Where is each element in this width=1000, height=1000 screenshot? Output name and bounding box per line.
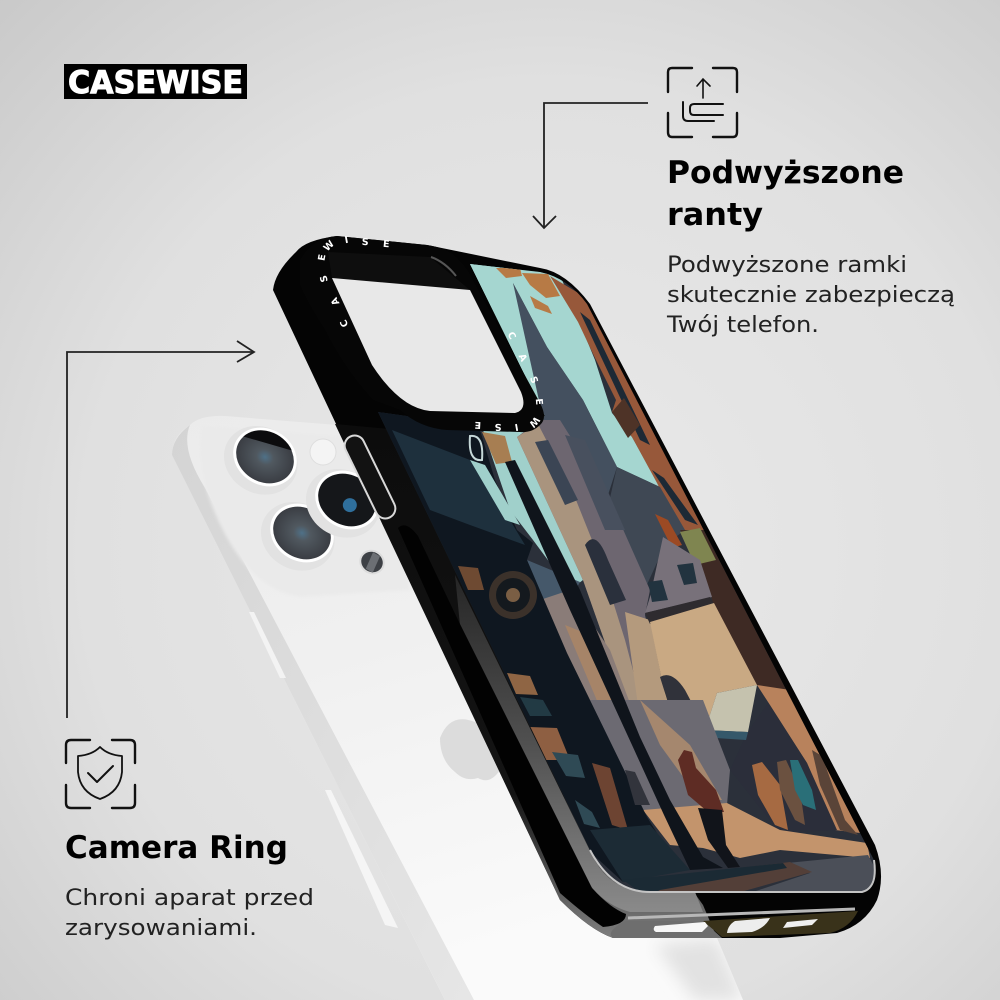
right dark building [680, 530, 800, 715]
awning [705, 685, 757, 732]
sky lower strip [483, 430, 583, 590]
shop signs [458, 566, 484, 590]
inner grey lip [455, 575, 703, 912]
gothic porch [625, 612, 667, 700]
ring lettering: A [516, 352, 529, 364]
dark alcove [794, 743, 837, 830]
distant hill [527, 560, 580, 599]
text: camera ring description: Chroni aparat przed [65, 885, 314, 911]
lens 2 [248, 489, 347, 584]
dormers [648, 563, 697, 602]
left dark building [378, 412, 656, 882]
ring lettering: E [383, 239, 390, 250]
clock [489, 571, 537, 619]
ring lettering: S [494, 421, 502, 432]
cornice of right building [612, 398, 640, 438]
lens 3 [293, 456, 392, 551]
ring lettering: S [318, 274, 331, 283]
arrow: raised edges connector [533, 103, 648, 228]
text: raised edges description: Twój telefon. [666, 312, 819, 338]
ring lettering: E [533, 398, 544, 405]
ring lettering [317, 235, 544, 432]
ring lettering: S [527, 375, 540, 385]
screen inner edge highlight [590, 850, 875, 892]
white phone back [172, 413, 743, 1000]
side button [249, 612, 286, 678]
inner black slot [398, 525, 626, 927]
port left [654, 922, 708, 932]
curb [626, 863, 787, 891]
case body [273, 236, 881, 938]
text: raised edges description: skutecznie zabezpieczą [667, 282, 955, 308]
ring lettering: I [344, 235, 349, 246]
case over phone translucent part [335, 424, 717, 938]
lens 1 [211, 413, 310, 508]
lower shading [655, 938, 743, 1000]
flowers [680, 528, 716, 565]
building right upper [550, 276, 705, 530]
camera ring [300, 235, 544, 432]
roof hill [610, 467, 685, 584]
bottom band olive [703, 911, 858, 937]
ring lettering: A [329, 295, 342, 307]
bottom band grey [611, 921, 722, 938]
lower street [753, 855, 876, 892]
phone side band [172, 425, 474, 1000]
ring lettering: W [526, 414, 541, 430]
text: camera ring description: zarysowaniami. [65, 915, 257, 941]
street mid [590, 700, 730, 812]
ring lettering: E [474, 419, 481, 430]
text: raised edges description: Podwyższone ramki [667, 252, 907, 278]
pedestrians [625, 750, 858, 835]
port centre [727, 918, 770, 933]
arrow: camera ring connector [67, 341, 254, 718]
logo: CASEWISE: CASEWISE [68, 65, 243, 101]
heading: Camera Ring: Camera Ring [65, 830, 288, 866]
ring lettering: C [338, 318, 351, 329]
building windows [580, 312, 698, 525]
red tower detail [655, 514, 682, 548]
icon: raised edges [668, 68, 737, 137]
cornice [645, 597, 714, 624]
ring lettering: S [361, 237, 369, 248]
screen artwork [370, 260, 890, 900]
phone case [273, 236, 890, 938]
text: camera ring description [65, 885, 314, 941]
man [678, 750, 740, 868]
distant building tan [544, 592, 629, 711]
icon: shield [66, 740, 135, 808]
heading: Podwyższone ranty [667, 155, 904, 233]
cathedral main [517, 420, 650, 672]
ring lettering: C [505, 330, 518, 341]
tan building [650, 603, 757, 716]
sky upper [465, 260, 660, 487]
apple logo [440, 719, 500, 780]
camera plateau [200, 426, 410, 597]
stairs [590, 825, 690, 882]
heading: Podwyższone ranty: ranty [667, 197, 763, 233]
port right [783, 919, 818, 928]
ring lettering: I [514, 421, 519, 432]
brick strip lower right [757, 685, 860, 833]
ring highlight [431, 257, 456, 276]
lamp post [505, 460, 723, 870]
tree leaves [496, 268, 560, 314]
camera opening [328, 252, 523, 413]
balcony teal [392, 430, 525, 545]
ring lettering: E [317, 253, 329, 262]
arch [660, 675, 690, 700]
text: raised edges description [666, 252, 955, 338]
lamp head [482, 432, 512, 464]
volume button [341, 432, 399, 522]
microphone [355, 545, 389, 579]
lit ground [643, 803, 870, 858]
cathedral spire [513, 283, 617, 493]
ring lettering: W [322, 238, 337, 254]
cathedral lit strip left [517, 426, 638, 700]
bottom edge highlight [628, 909, 855, 918]
side button long [325, 790, 398, 928]
cathedral dark windows [535, 440, 578, 505]
mansard roof [645, 537, 712, 613]
flash [310, 439, 336, 465]
heading: Podwyższone ranty: Podwyższone [667, 155, 904, 191]
